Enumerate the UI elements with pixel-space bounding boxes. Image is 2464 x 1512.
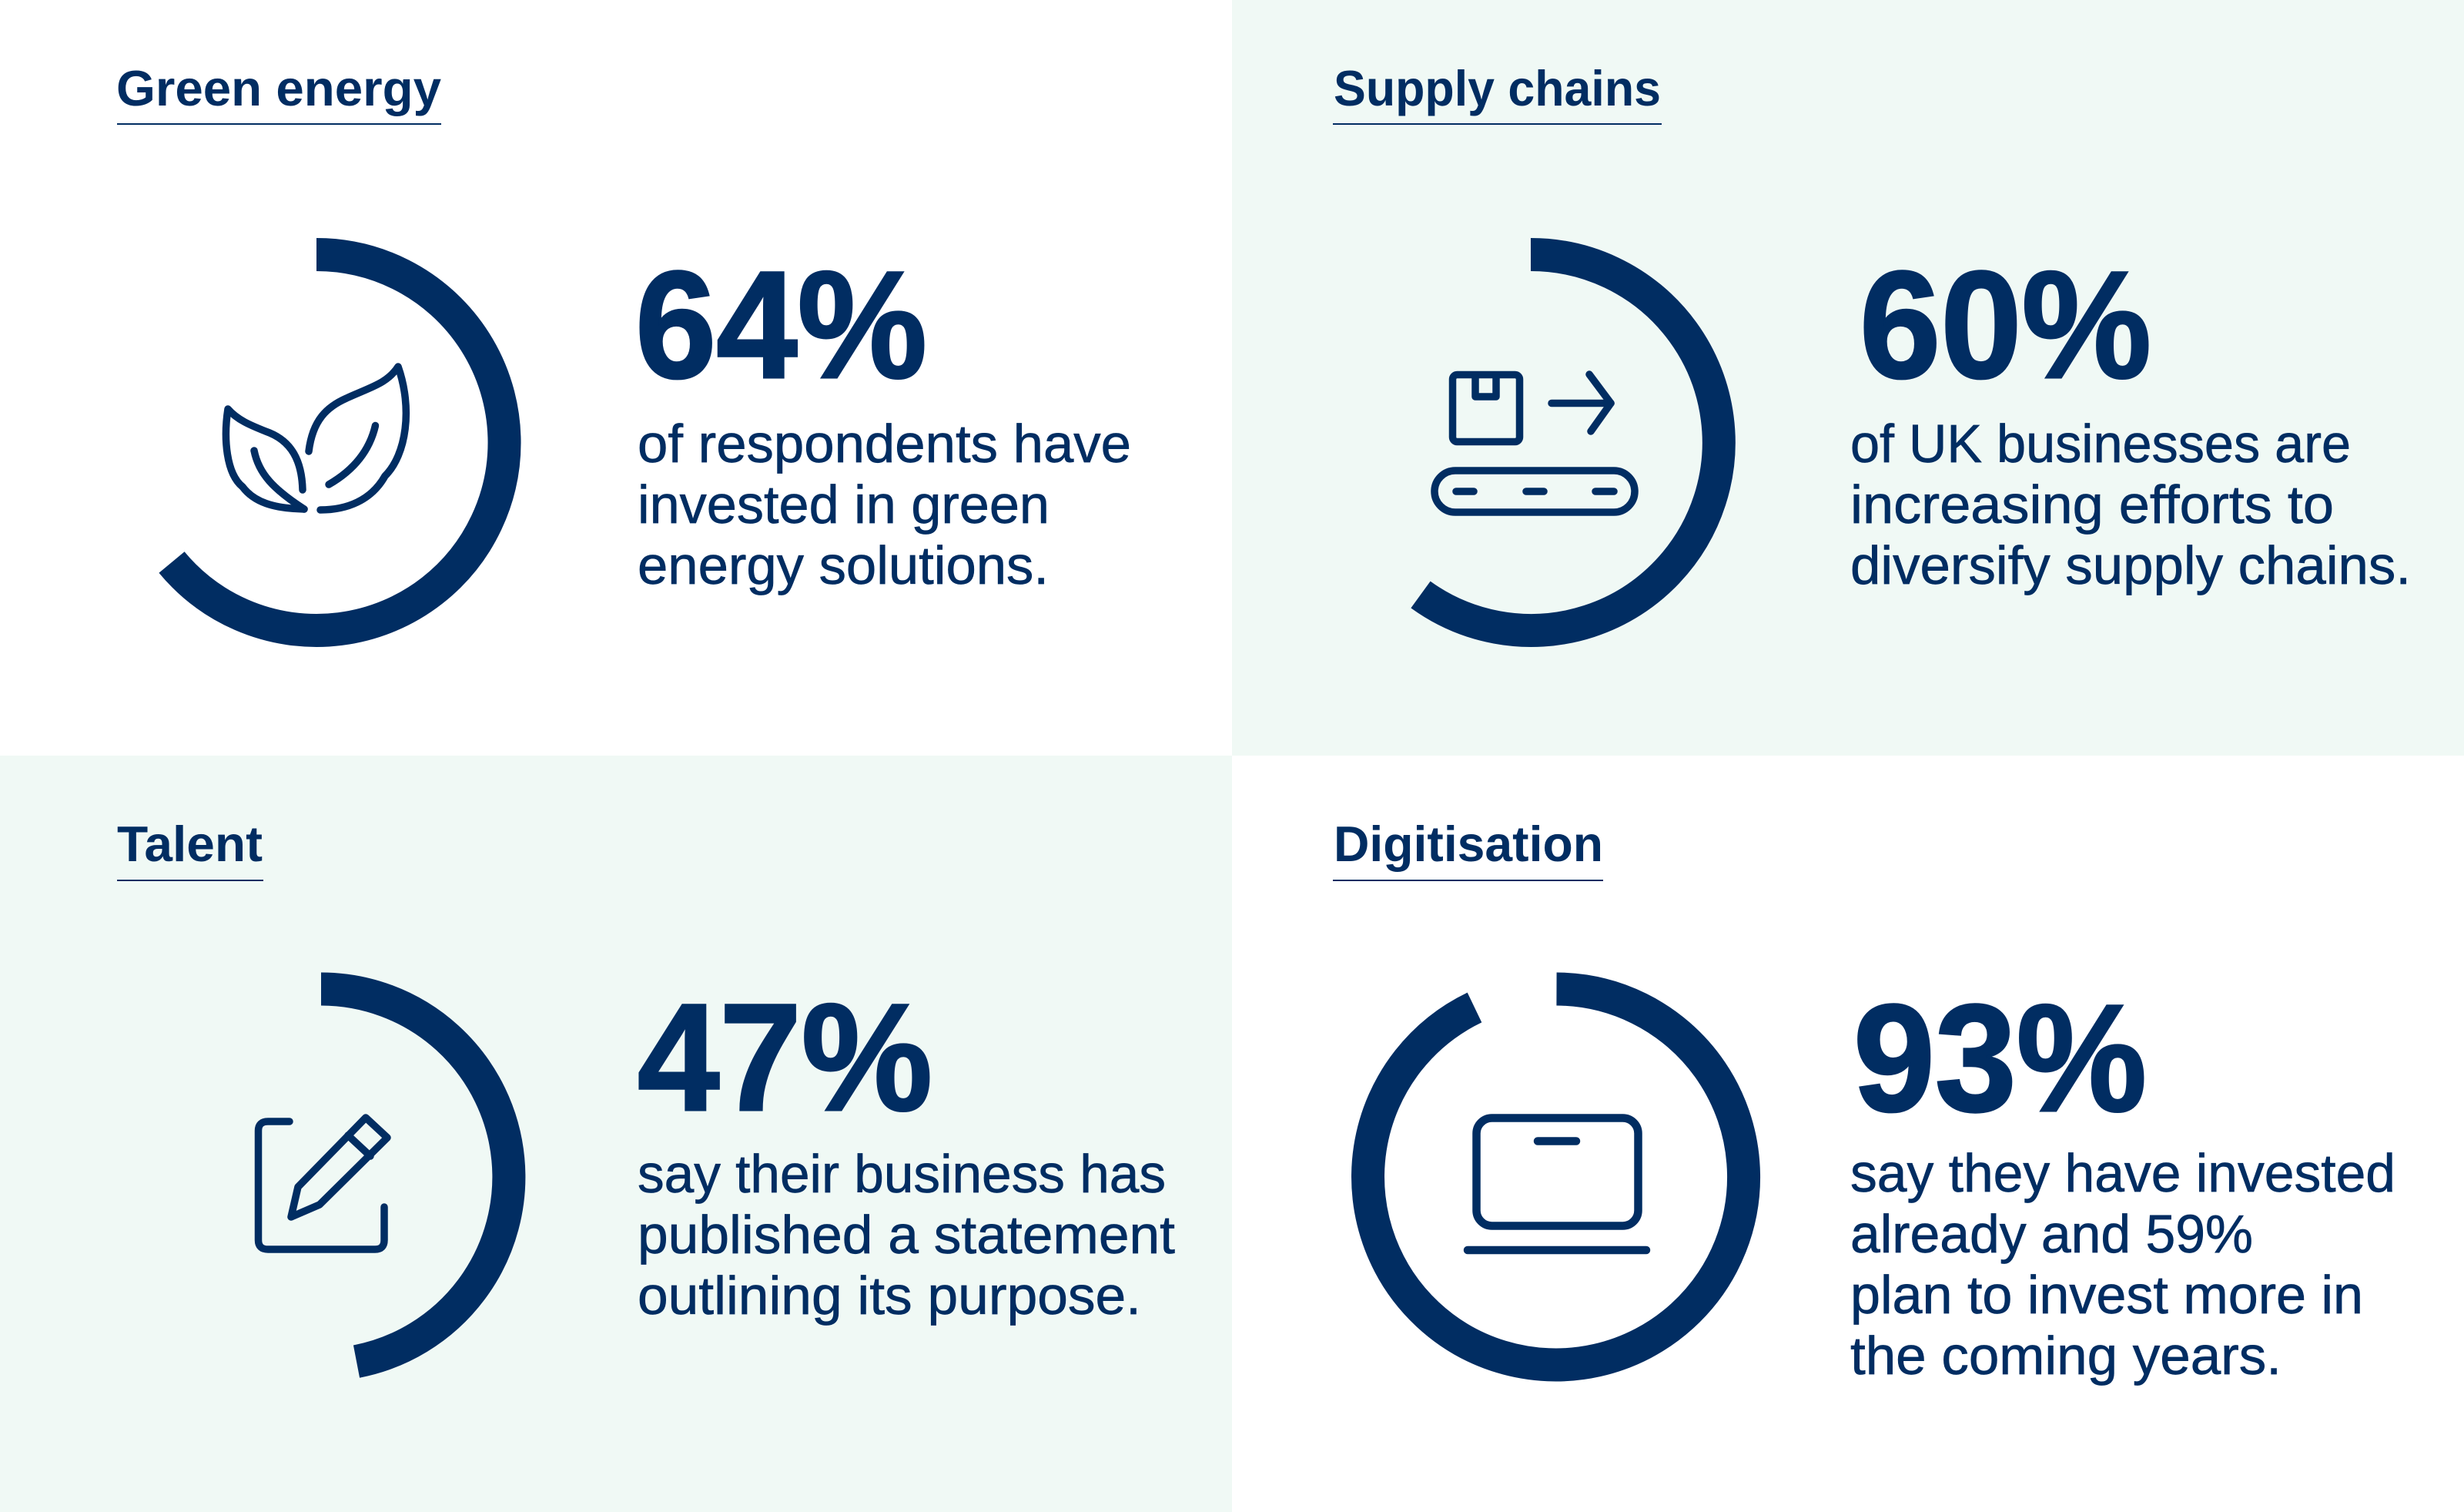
text block: supply chains description: of UK businesses are bbox=[1850, 414, 2351, 474]
text block: digitisation description: plan to invest more in bbox=[1850, 1265, 2363, 1325]
icon: laptop bbox=[1468, 1118, 1646, 1250]
text block: green energy description: of respondents have bbox=[638, 414, 1131, 474]
text block: talent description: outlining its purpose. bbox=[638, 1266, 1141, 1326]
statistic: 47%: 47% bbox=[638, 972, 932, 1142]
text block: digitisation description: say they have invested bbox=[1850, 1143, 2395, 1203]
text block: green energy description: energy solutions. bbox=[638, 535, 1049, 595]
heading: supply chains: Supply chains bbox=[1334, 60, 1661, 116]
ring chart: 47% bbox=[321, 989, 509, 1362]
statistic: 60%: 60% bbox=[1860, 240, 2151, 410]
ring chart: 64% bbox=[172, 254, 504, 630]
text block: talent description: published a statement bbox=[638, 1205, 1175, 1265]
heading: digitisation: Digitisation bbox=[1334, 816, 1603, 872]
text block: talent description: say their business has bbox=[638, 1144, 1166, 1204]
icon: pencil on notepad bbox=[259, 1118, 387, 1249]
text block: digitisation description bbox=[1850, 1143, 2395, 1386]
statistic: 64%: 64% bbox=[635, 240, 927, 410]
ring chart: 93% bbox=[1368, 989, 1744, 1365]
text block: digitisation description: the coming years. bbox=[1850, 1326, 2282, 1386]
heading: talent: Talent bbox=[117, 816, 263, 872]
text block: supply chains description: diversify supply chains. bbox=[1850, 535, 2411, 595]
panel: supply chains bbox=[1232, 0, 2464, 756]
ring chart: 60% bbox=[1421, 254, 1719, 630]
panel: green energy bbox=[0, 0, 1232, 756]
icon: conveyor belt with parcel and arrow bbox=[1435, 374, 1635, 512]
statistic: 93%: 93% bbox=[1853, 973, 2147, 1143]
text block: digitisation description: already and 59% bbox=[1850, 1204, 2253, 1264]
icon: leaves bbox=[226, 367, 406, 510]
text block: green energy description bbox=[638, 414, 1131, 595]
text block: supply chains description bbox=[1850, 414, 2411, 595]
text block: talent description bbox=[638, 1144, 1175, 1326]
text block: green energy description: invested in green bbox=[638, 474, 1050, 535]
text block: supply chains description: increasing efforts to bbox=[1850, 474, 2334, 535]
panel: digitisation bbox=[1232, 756, 2464, 1512]
panel: talent bbox=[0, 756, 1232, 1512]
heading: green energy: Green energy bbox=[116, 60, 441, 116]
